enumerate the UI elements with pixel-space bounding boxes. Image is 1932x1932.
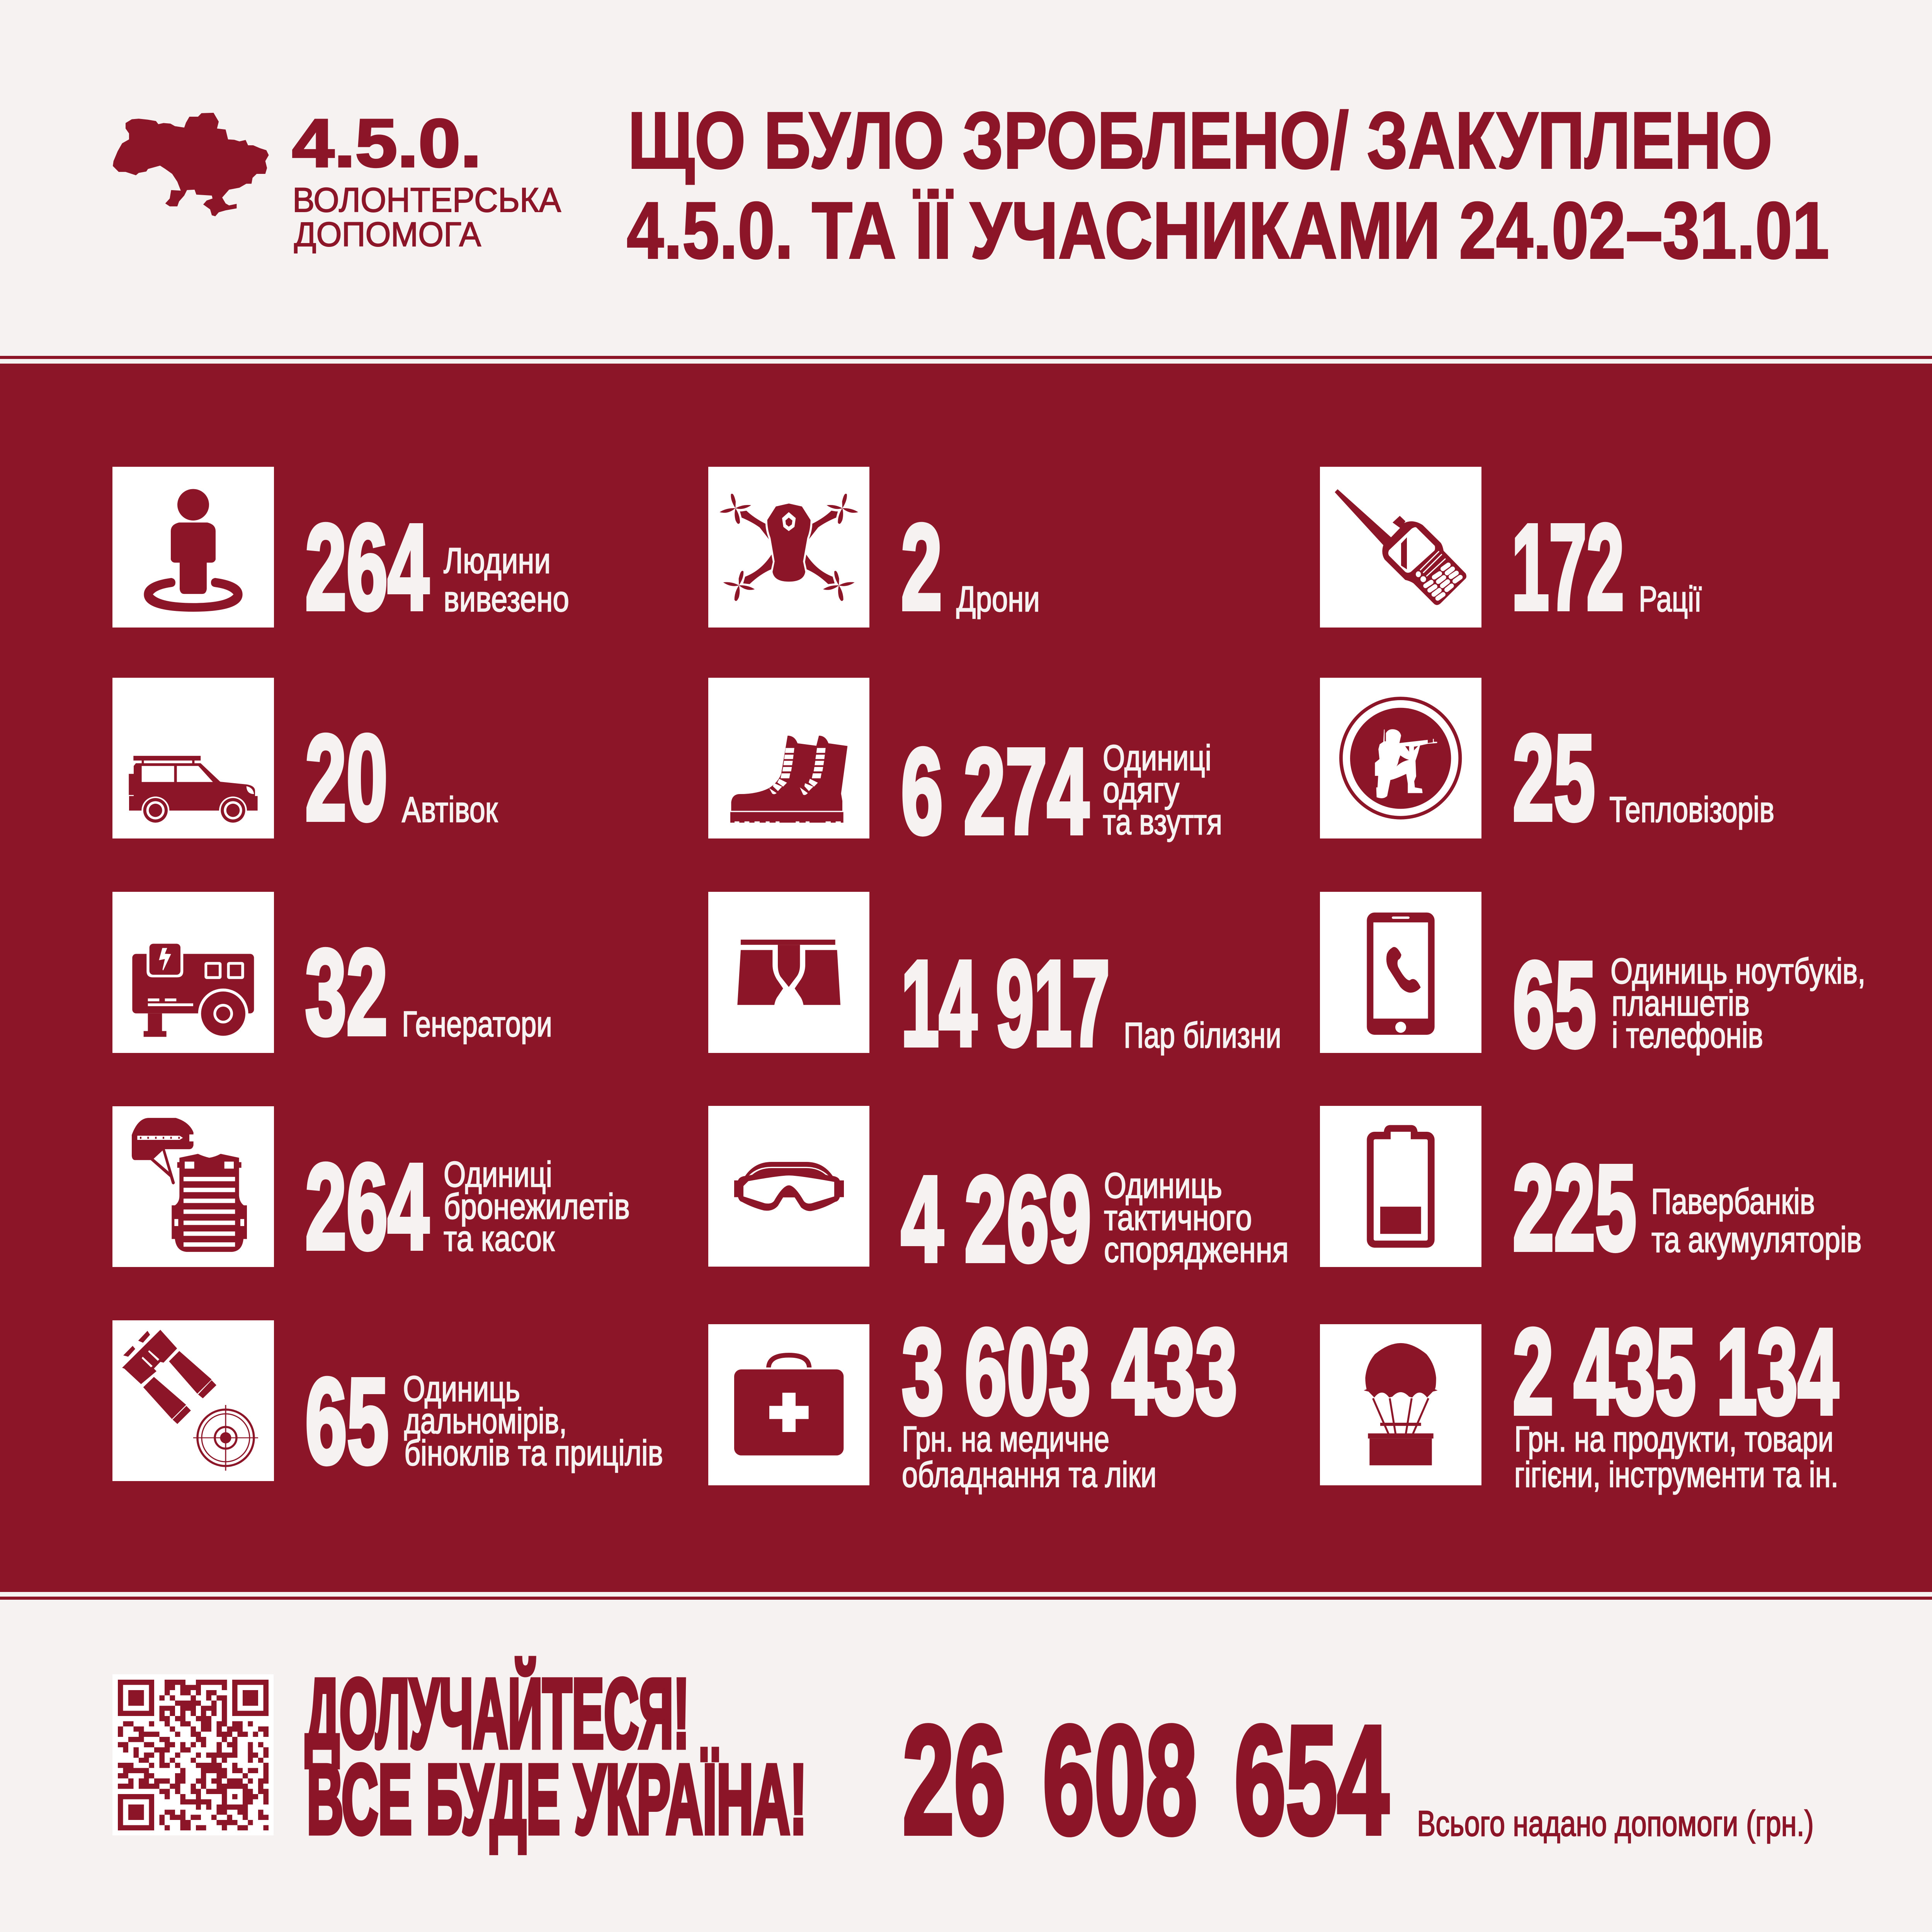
panel: statistics bbox=[0, 364, 1932, 1592]
icon: parachute cargo bbox=[1364, 1343, 1438, 1465]
icon: target bbox=[193, 1405, 258, 1471]
stat: power banks: та акумуляторів bbox=[1651, 1219, 1862, 1260]
icon: helmet and vest bbox=[132, 1118, 247, 1252]
icon: underwear bbox=[737, 940, 840, 1005]
logo wordmark: 4.5.0. bbox=[292, 105, 481, 181]
slogan: ДОЛУЧАЙТЕСЯ! bbox=[305, 1658, 689, 1768]
stat: cars: Автівок bbox=[402, 789, 498, 830]
stat: underwear bbox=[708, 892, 1281, 1071]
stat: rangefinders, binoculars, sights: дальномірів, bbox=[404, 1401, 567, 1441]
stat: power banks bbox=[1320, 1106, 1862, 1276]
icon: generator bbox=[132, 944, 254, 1037]
icon: goggles bbox=[734, 1162, 844, 1211]
stat: vests and helmets: Одиниці bbox=[444, 1154, 552, 1194]
icon: boots bbox=[730, 736, 847, 823]
stat: rangefinders, binoculars, sights: 65 bbox=[305, 1353, 389, 1489]
stat: clothes and shoes: одягу bbox=[1103, 770, 1179, 810]
icon: map of Ukraine bbox=[113, 113, 269, 216]
title bbox=[627, 96, 1829, 276]
stat: thermal imagers: Тепловізорів bbox=[1609, 789, 1774, 830]
icon: drone bbox=[719, 494, 858, 601]
logo wordmark: ВОЛОНТЕРСЬКА bbox=[293, 180, 561, 219]
icon: binoculars bbox=[122, 1330, 216, 1424]
stat: tactical gear: 4 269 bbox=[901, 1151, 1091, 1287]
stat: people evacuated: вивезено bbox=[444, 579, 569, 619]
icon: person bbox=[144, 489, 243, 612]
stat: underwear: Пар білизни bbox=[1124, 1015, 1281, 1055]
stat: radios: 172 bbox=[1512, 499, 1624, 635]
stat: power banks: Павербанків bbox=[1651, 1181, 1815, 1221]
stat: generators: Генератори bbox=[402, 1004, 552, 1044]
total label: Всього надано допомоги (грн.) bbox=[1417, 1803, 1814, 1844]
stat: tactical gear: спорядження bbox=[1104, 1230, 1289, 1270]
stat: people evacuated: 264 bbox=[305, 499, 429, 635]
stat: drones: Дрони bbox=[956, 579, 1040, 619]
stat: thermal imagers bbox=[1320, 678, 1774, 845]
stat: people evacuated: Людини bbox=[444, 541, 551, 581]
stat: rangefinders, binoculars, sights: Одиниць bbox=[403, 1369, 520, 1409]
footer bbox=[112, 1658, 1814, 1866]
stat: tactical gear bbox=[708, 1106, 1289, 1287]
stat: medical: 3 603 433 bbox=[902, 1304, 1237, 1439]
stat: clothes and shoes bbox=[708, 678, 1222, 859]
stat: tactical gear: тактичного bbox=[1104, 1197, 1252, 1238]
stat: rangefinders, binoculars, sights: біноклів та прицілів bbox=[404, 1433, 663, 1473]
stat: generators bbox=[112, 892, 552, 1060]
stat: cars: 20 bbox=[305, 710, 388, 845]
stat: food, hygiene, tools bbox=[1320, 1304, 1839, 1495]
stat: laptops, tablets, phones: і телефонів bbox=[1612, 1015, 1763, 1055]
header bbox=[113, 96, 1829, 276]
logo wordmark: ДОПОМОГА bbox=[294, 215, 481, 253]
stat: laptops, tablets, phones: Одиниць ноутбуків, bbox=[1611, 951, 1866, 991]
stat: clothes and shoes: 6 274 bbox=[901, 723, 1089, 859]
stat: laptops, tablets, phones bbox=[1320, 892, 1866, 1072]
stat: vests and helmets: та касок bbox=[444, 1218, 555, 1259]
icon: first aid kit bbox=[734, 1353, 844, 1456]
stat: tactical gear: Одиниць bbox=[1104, 1165, 1222, 1206]
stat: underwear: 14 917 bbox=[901, 935, 1110, 1071]
stat: drones: 2 bbox=[901, 499, 942, 635]
icon: walkie-talkie bbox=[1335, 489, 1466, 605]
stat: laptops, tablets, phones: планшетів bbox=[1612, 983, 1750, 1023]
stat: food, hygiene, tools: гігієни, інструменти та ін. bbox=[1514, 1454, 1838, 1495]
slogan bbox=[305, 1658, 807, 1854]
stat: cars bbox=[112, 678, 498, 845]
stat: medical: обладнання та ліки bbox=[902, 1454, 1156, 1495]
stat: generators: 32 bbox=[305, 924, 388, 1060]
stat: vests and helmets: бронежилетів bbox=[444, 1186, 630, 1226]
stat: medical: Грн. на медичне bbox=[902, 1419, 1109, 1459]
stat: medical bbox=[708, 1304, 1237, 1495]
icon: soldier in scope bbox=[1339, 697, 1462, 820]
stat: radios: Рації bbox=[1639, 579, 1702, 619]
icon: car bbox=[129, 756, 258, 824]
stat: radios bbox=[1320, 467, 1702, 635]
icon: battery bbox=[1367, 1125, 1435, 1248]
stat: thermal imagers: 25 bbox=[1513, 710, 1595, 845]
stat: vests and helmets bbox=[112, 1106, 630, 1274]
QR code bbox=[112, 1674, 274, 1835]
stat: laptops, tablets, phones: 65 bbox=[1513, 937, 1596, 1072]
stat: rangefinders, binoculars, sights bbox=[112, 1320, 663, 1489]
stat: drones bbox=[708, 467, 1040, 635]
stat: power banks: 225 bbox=[1513, 1140, 1636, 1276]
stat: clothes and shoes: Одиниці bbox=[1103, 738, 1211, 778]
icon: smartphone bbox=[1367, 913, 1435, 1035]
stat: food, hygiene, tools: Грн. на продукти, товари bbox=[1514, 1419, 1833, 1459]
stat: clothes and shoes: та взуття bbox=[1103, 802, 1222, 842]
logo wordmark bbox=[292, 105, 561, 253]
slogan: ВСЕ БУДЕ УКРАЇНА! bbox=[307, 1744, 807, 1854]
stat: people evacuated bbox=[112, 467, 569, 635]
total amount: 26 608 654 bbox=[903, 1694, 1389, 1866]
stat: vests and helmets: 264 bbox=[305, 1139, 429, 1274]
